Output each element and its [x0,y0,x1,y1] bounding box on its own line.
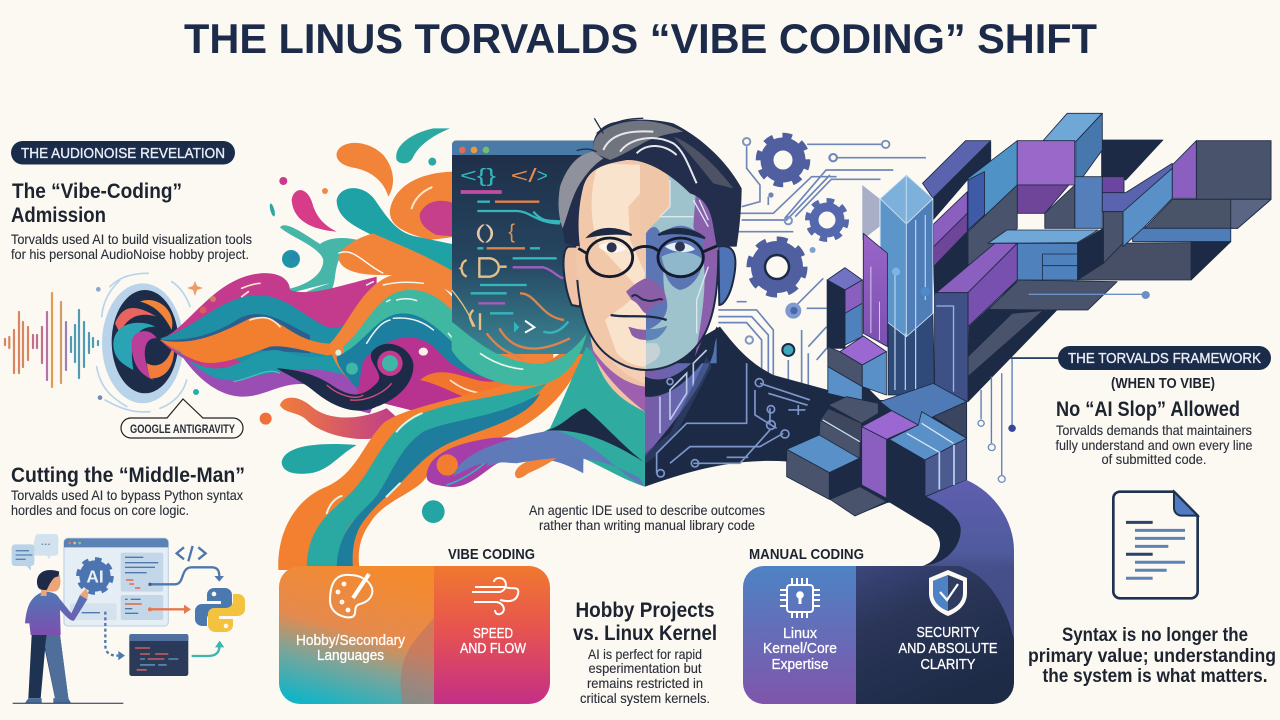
nose [626,278,667,313]
ears [563,247,580,307]
icon: AI gear: AI [86,566,104,586]
centre caption: An agentic IDE used to describe outcomes [529,502,765,518]
body text: maintainers: fully understand and own every line [1056,437,1253,453]
panel left half: linux kernel: Kernel/Core [763,640,837,657]
panel right half: speed and flow: AND FLOW [460,640,527,657]
mouth [611,315,667,320]
browser window [64,538,168,626]
central tower [862,175,968,402]
centre text: hobby projects vs linux kernel: vs. Linux Kernel [573,622,717,645]
heading: vibe-coding admission: The “Vibe-Coding” [12,180,182,203]
icon: chat bubbles [12,534,58,571]
heading: vibe-coding admission [11,180,182,227]
pill heading: the torvalds framework: THE TORVALDS FRAMEWORK [1068,351,1261,367]
illustration: flow over editor [452,290,587,386]
illustration: code editor window: () [475,222,495,243]
centre text: hobby projects vs linux kernel: Hobby Projects [576,599,714,622]
glasses [578,238,719,277]
left crystal and small block [827,233,887,402]
body text: maintainers [1056,422,1253,467]
centre caption [529,502,765,533]
back blocks [923,113,1271,402]
icon: code brackets [177,546,206,561]
centre text: hobby projects vs linux kernel: esperimentation but [588,660,702,676]
panel right half: security and clarity [856,566,1014,704]
body text: maintainers: of submitted code. [1102,451,1206,467]
portrait: face [558,118,742,370]
heading: manual coding: MANUAL CODING [749,546,864,563]
icon: document [1113,492,1198,598]
panel left half: hobby/secondary languages: Languages [317,648,384,664]
icon: chip with keyhole [780,578,820,618]
heading: vibe-coding admission: Admission [11,204,106,227]
icon: wind [472,578,518,614]
illustration: developer using AI with python [12,534,245,703]
body text: audionoise: Torvalds used AI to build visualization tools [11,231,252,247]
section: cutting the middle-man text: Cutting the “Middle-Man” [11,464,245,487]
illustration: code editor window [452,141,619,358]
right arch connecting blocks to manual panel [857,480,1014,593]
eyebrows [588,229,705,238]
icon: gear middle [808,201,846,239]
illustration: coloured flow ribbons and splashes [160,128,590,570]
icon: audio waveform [5,282,98,400]
jacket [645,327,840,487]
panel right half: security and clarity: SECURITY [916,624,980,641]
hair [558,120,742,247]
illustration: circuit traces and gears [718,138,837,390]
panel right half: security and clarity: AND ABSOLUTE [898,640,998,657]
centre text: hobby projects vs linux kernel: AI is perfect for rapid [588,646,702,662]
section: cutting the middle-man text: hordles and focus on core logic. [11,502,189,518]
person [25,570,88,703]
centre caption: rather than writing manual library code [539,517,755,533]
closing statement [1028,625,1276,687]
icon: gear large [750,240,804,294]
panel left half: hobby/secondary languages: Hobby/Secondary [296,633,406,649]
icon: palette [330,574,372,617]
panel: manual coding [743,546,1014,704]
top right gear traces [785,141,926,218]
code window small [129,634,188,676]
panel right half: security and clarity: CLARITY [920,656,976,673]
section: cutting the middle-man text [11,464,245,518]
panel right half: speed and flow [434,566,550,704]
panel left half: hobby/secondary languages [279,566,434,704]
icon: python logo [195,588,245,632]
panel right half: speed and flow: SPEED [473,625,513,642]
title: THE LINUS TORVALDS “VIBE CODING” SHIFT [184,15,1097,62]
section: cutting the middle-man text: Torvalds used AI to bypass Python syntax [11,487,243,503]
face base left [576,153,646,370]
jaw outline [577,250,718,370]
heading: no AI slop allowed: No “AI Slop” Allowed [1056,398,1240,421]
neck left [590,333,645,412]
icon: gear top [759,136,807,184]
heading: vibe coding: VIBE CODING [448,546,535,563]
neck right [645,333,717,457]
body text: audionoise: for his personal AudioNoise hobby project. [11,246,249,262]
closing statement: Syntax is no longer the [1062,625,1248,646]
callout: google antigravity: GOOGLE ANTIGRAVITY [130,422,235,436]
body text: maintainers: Torvalds demands that maintainers [1056,422,1252,438]
face base right [646,153,718,370]
callout: google antigravity [121,399,243,438]
illustration: code editor window: { [508,221,515,243]
section: Torvalds framework text [1003,346,1271,467]
arrows [105,567,224,660]
shirt teal [517,347,645,487]
panel: vibe coding [279,546,550,704]
illustration: base blocks [787,383,967,516]
pill heading: the audionoise revelation: THE AUDIONOISE REVELATION [21,146,225,162]
panel left half: linux kernel [743,566,856,704]
illustration: code editor window: > [537,166,548,187]
centre text: hobby projects vs linux kernel [573,599,717,706]
body text: audionoise [11,231,252,262]
collar [547,408,643,462]
portrait: shirt and jacket [453,327,840,487]
illustration: code editor window: </ [511,166,538,187]
pill heading: the torvalds framework [1003,346,1271,370]
icon: shield [929,570,967,616]
illustration: isometric blocks [827,113,1271,482]
ground line [13,702,123,705]
subheading: when to vibe: (WHEN TO VIBE) [1111,376,1215,392]
panel left half: linux kernel: Expertise [772,656,828,673]
code symbols: <{} [460,166,497,187]
drop lines [978,291,1150,482]
section: AudioNoise revelation text [11,141,252,262]
illustration: colour vortex [96,273,190,412]
base navy under blocks [787,380,967,516]
eyes [598,242,627,252]
icon: AI gear [78,559,112,593]
jacket circuit [657,363,823,477]
centre text: hobby projects vs linux kernel: critical system kernels. [580,690,710,706]
centre text: hobby projects vs linux kernel: remains restricted in [587,675,703,691]
icon: sparkle and dots [187,281,216,395]
pill heading: the audionoise revelation [11,141,235,164]
panel left half: linux kernel: Linux [783,625,817,642]
